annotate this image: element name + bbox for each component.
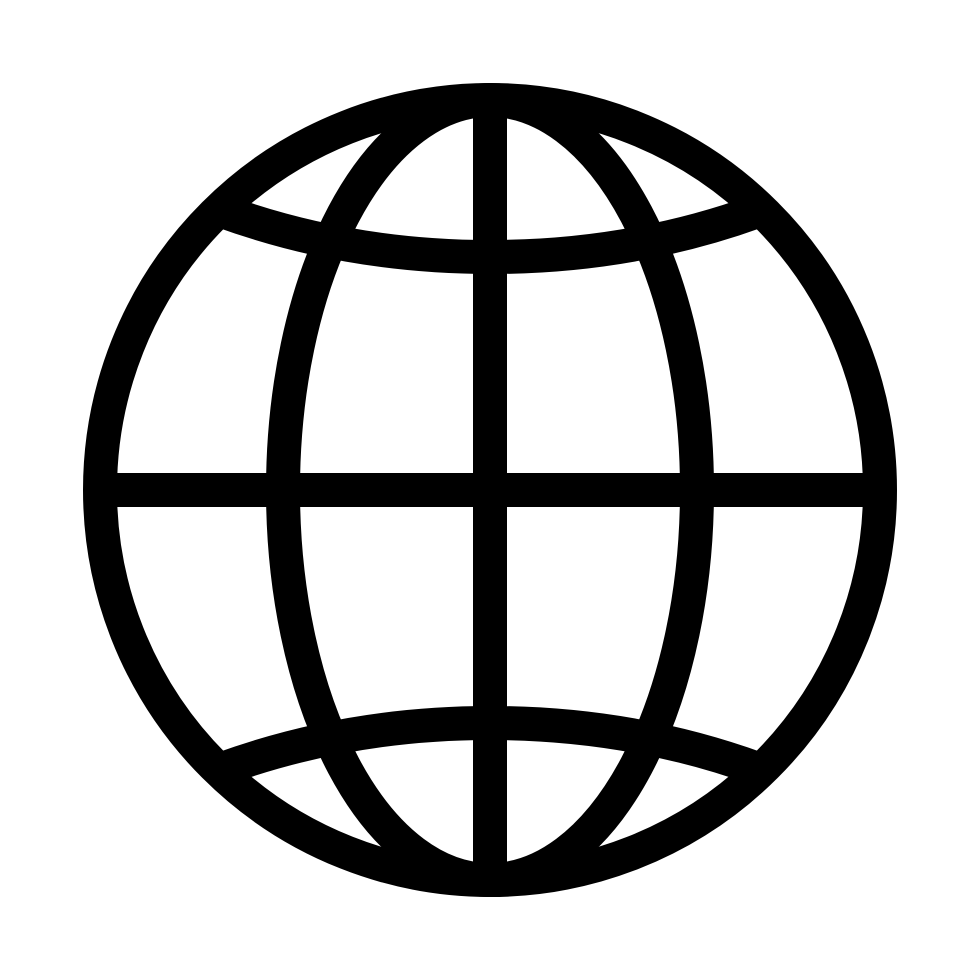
upper latitude arc <box>222 211 758 257</box>
equator line <box>100 473 880 507</box>
outer circle <box>100 100 880 880</box>
lower latitude arc <box>222 723 758 769</box>
central meridian ellipse <box>283 100 697 880</box>
vertical meridian line <box>473 100 507 880</box>
